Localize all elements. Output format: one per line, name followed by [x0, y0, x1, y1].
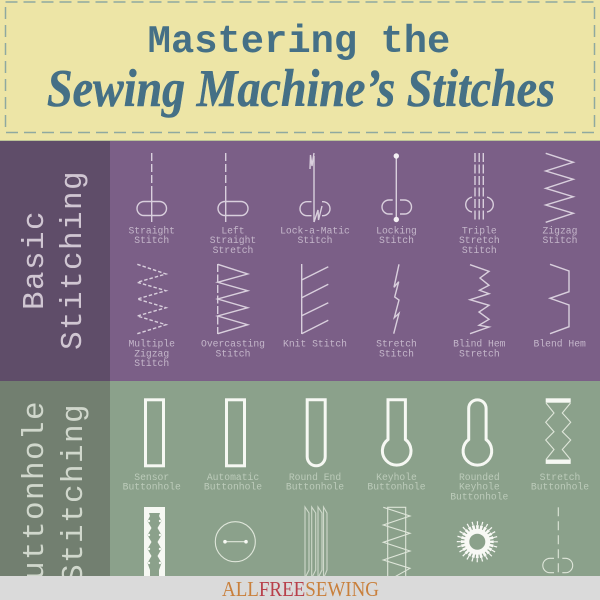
label: rounded keyhole buttonhole: Rounded: [459, 472, 500, 483]
label: left straight stretch: Stretch: [213, 245, 253, 256]
label: zigzag stitch: Zigzag: [543, 226, 577, 236]
header banner: [0, 0, 600, 140]
label: locking stitch: Stitch: [379, 235, 414, 246]
icon: bar tack buttonhole: [144, 507, 165, 577]
label: automatic buttonhole: Buttonhole: [204, 482, 262, 493]
icon: stretch stitch: [394, 264, 399, 334]
icon: keyhole buttonhole: [382, 400, 411, 465]
stitch: locking stitch: [376, 153, 417, 246]
stitch: blend hem: [534, 264, 586, 350]
icon: straight stitch: [137, 153, 166, 222]
stitch: lock-a-matic stitch: [280, 153, 350, 246]
label: overcasting stitch: Overcasting: [201, 339, 265, 350]
stitch: blind hem stretch: [453, 265, 506, 359]
section heading: buttonhole stitching: Buttonhole: [18, 400, 53, 600]
icon: multiple zigzag stitch: [137, 264, 166, 334]
icon: knit stitch: [302, 264, 328, 334]
stitch: overcasting stitch: [201, 264, 265, 359]
section heading: basic stitching: [0, 141, 110, 381]
icon: eyelet: [459, 523, 496, 560]
label: lock-a-matic stitch: Lock-a-Matic: [280, 226, 350, 236]
icon: blind hem stretch: [470, 265, 489, 334]
stitch: straight stitch: [128, 153, 175, 246]
stitch: keyhole buttonhole: [367, 400, 426, 493]
title line one: Mastering the: [148, 20, 450, 64]
label: zigzag stitch: Stitch: [543, 235, 577, 246]
icon: zigzag over straight stitch: [383, 507, 410, 579]
label: automatic buttonhole: Automatic: [207, 472, 259, 483]
icon: round end buttonhole: [307, 400, 325, 466]
label: stretch buttonhole: Buttonhole: [531, 482, 589, 493]
section heading: basic stitching: Basic: [18, 210, 53, 310]
label: stretch stitch: Stretch: [376, 339, 417, 350]
icon: pintuck stitch: [305, 507, 327, 576]
label: blend hem: Blend Hem: [534, 339, 586, 350]
label: overcasting stitch: Stitch: [216, 348, 250, 359]
section heading: buttonhole stitching: Stitching: [57, 403, 92, 583]
footer bar: [0, 576, 600, 600]
label: triple stretch stitch: Stretch: [459, 235, 500, 246]
icon: button sewing: [215, 522, 255, 562]
icon: stretch buttonhole: [546, 398, 571, 464]
stitch: round end buttonhole: [286, 400, 344, 493]
icon: sensor buttonhole: [146, 400, 164, 466]
icon: blend hem: [550, 264, 569, 334]
icon: triple stretch stitch: [466, 153, 493, 222]
label: triple stretch stitch: Triple: [462, 226, 497, 236]
icon: rounded keyhole buttonhole: [463, 400, 492, 465]
label: round end buttonhole: Buttonhole: [286, 482, 344, 493]
icon: straight stitch with bar: [543, 507, 573, 576]
panel: basic stitching: [0, 141, 600, 381]
stitch: multiple zigzag stitch: [128, 264, 175, 369]
stitch: stretch buttonhole: [531, 398, 589, 493]
label: stretch stitch: Stitch: [379, 348, 414, 359]
icon: automatic buttonhole: [226, 400, 244, 466]
label: stretch buttonhole: Stretch: [540, 472, 580, 483]
label: left straight stretch: Left: [221, 226, 245, 236]
stitch: triple stretch stitch: [459, 153, 500, 256]
label: multiple zigzag stitch: Stitch: [134, 358, 169, 369]
label: blind hem stretch: Blind Hem: [453, 339, 506, 350]
label: multiple zigzag stitch: Zigzag: [134, 348, 169, 359]
stitch: rounded keyhole buttonhole: [450, 400, 509, 502]
icon: overcasting stitch: [218, 264, 248, 334]
label: blind hem stretch: Stretch: [459, 348, 500, 359]
label: round end buttonhole: Round End: [289, 472, 341, 483]
stitch: automatic buttonhole: [204, 400, 262, 493]
label: keyhole buttonhole: Keyhole: [376, 472, 417, 483]
section heading: basic stitching: Stitching: [56, 170, 91, 350]
label: sensor buttonhole: Sensor: [134, 472, 169, 483]
stitch: zigzag stitch: [543, 153, 577, 246]
label: left straight stretch: Straight: [210, 235, 256, 246]
label: locking stitch: Locking: [376, 226, 417, 236]
label: straight stitch: Stitch: [134, 235, 169, 246]
panel: buttonhole stitching: [0, 381, 600, 600]
section heading: buttonhole stitching: [0, 381, 110, 600]
stitch: knit stitch: [283, 264, 347, 350]
label: lock-a-matic stitch: Stitch: [298, 235, 332, 246]
label: multiple zigzag stitch: Multiple: [128, 339, 175, 350]
label: straight stitch: Straight: [128, 226, 175, 236]
icon: left straight stretch: [218, 153, 248, 222]
label: triple stretch stitch: Stitch: [462, 245, 497, 256]
icon: lock-a-matic stitch: [300, 153, 330, 222]
label: rounded keyhole buttonhole: Keyhole: [459, 482, 500, 493]
icon: locking stitch: [382, 153, 412, 222]
label: sensor buttonhole: Buttonhole: [123, 482, 181, 493]
label: knit stitch: Knit Stitch: [283, 339, 347, 350]
stitch: sensor buttonhole: [123, 400, 181, 493]
icon: zigzag stitch: [546, 153, 573, 222]
label: rounded keyhole buttonhole: Buttonhole: [450, 491, 509, 502]
stitch: left straight stretch: [210, 153, 256, 256]
stitch: stretch stitch: [376, 264, 417, 359]
label: keyhole buttonhole: Buttonhole: [367, 482, 426, 493]
